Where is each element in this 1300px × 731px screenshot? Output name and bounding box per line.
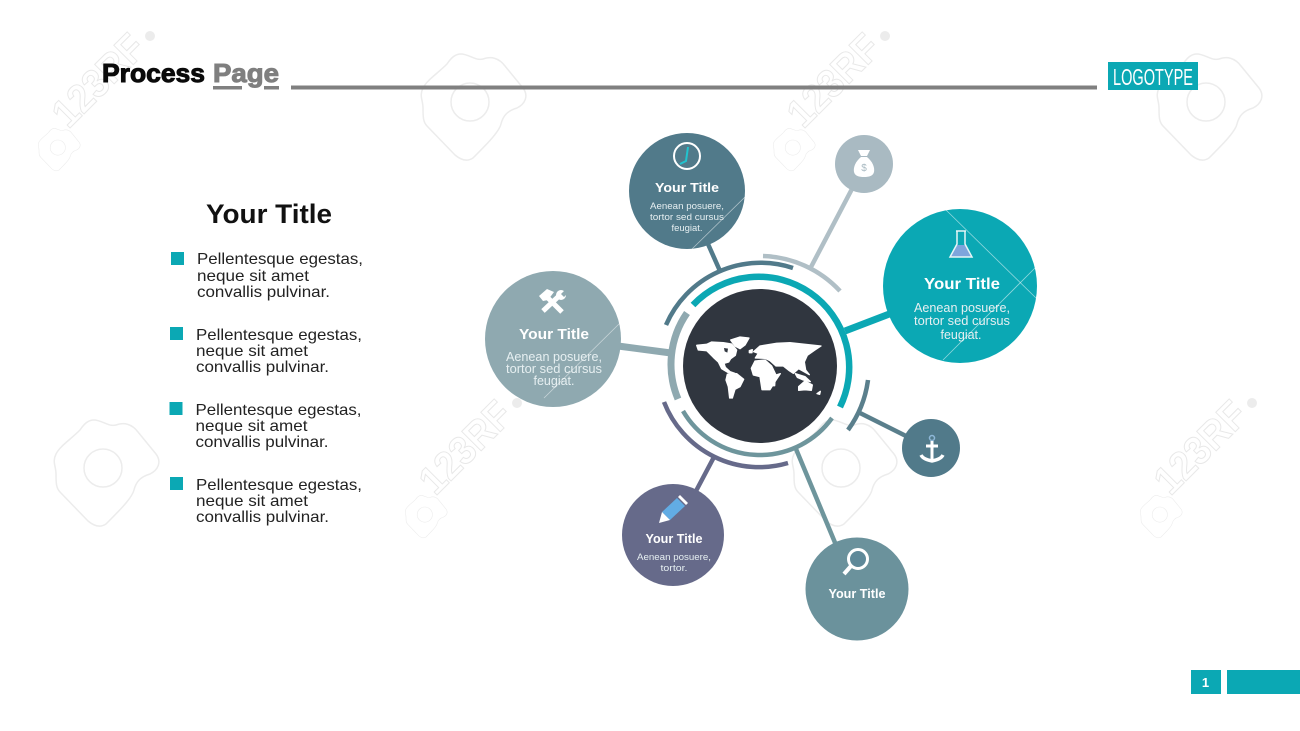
bullet 2: Pellentesque egestas, [196,327,362,344]
node: magnifier: Your Title [828,587,886,601]
logotype: LOGOTYPE [1113,64,1193,90]
central globe [683,289,837,443]
bullet 2: neque sit amet [196,343,309,360]
node: tools: feugiat. [534,374,574,388]
icon: money bag: $ [861,163,867,174]
left panel title: Your Title [206,199,332,229]
page heading [102,58,279,90]
node: flask: Aenean posuere, [914,301,1010,315]
node: tools: Aenean posuere, [506,350,602,364]
node: flask [883,209,1037,363]
node: money bag [835,135,893,193]
node: anchor [902,419,960,477]
bullet 3: convallis pulvinar. [196,434,328,451]
bullet 3 [170,402,362,451]
node: clock [629,133,745,249]
watermark stamps [38,26,1262,538]
bullet 4 [170,477,362,526]
node: flask: feugiat. [940,328,982,342]
node: pencil: tortor. [660,563,688,574]
bullet 1 [171,251,363,301]
page number [1191,670,1221,694]
bullet 1: neque sit amet [197,268,310,285]
node: clock: tortor sed cursus [650,212,724,223]
icon: crossed tools [539,289,569,312]
icon: flask [950,231,972,257]
page heading: Process [102,58,205,88]
page number: 1 [1202,675,1209,690]
bullet 2 [170,327,362,376]
node: tools [485,271,621,407]
node: tools: tortor sed cursus [506,362,602,376]
bullet 4: Pellentesque egestas, [196,477,362,494]
bullet 4: neque sit amet [196,493,309,510]
icon: pencil [659,495,688,523]
bullet 4: convallis pulvinar. [196,509,329,526]
node: tools: Your Title [519,326,589,343]
node: clock: Your Title [655,180,719,195]
node: pencil: Aenean posuere, [637,552,711,563]
icon: anchor [921,436,943,461]
node: pencil: Your Title [646,532,703,546]
header rule [291,86,1097,90]
bullet 3: Pellentesque egestas, [196,402,362,419]
bullet 3: neque sit amet [196,418,308,435]
bullet 2: convallis pulvinar. [196,359,329,376]
page heading: Page [213,58,279,88]
node: magnifier [806,538,908,640]
connector lines [618,187,908,545]
central ring arcs [664,256,868,467]
world map [697,337,821,398]
node: flask: tortor sed cursus [914,314,1010,328]
node: pencil [622,484,724,586]
bullet 1: Pellentesque egestas, [197,251,363,268]
bullet 1: convallis pulvinar. [197,284,330,301]
icon: clock [674,143,700,169]
logotype [1108,62,1198,90]
footer bar [1227,670,1300,694]
node: flask: Your Title [924,276,1000,293]
node: clock: Aenean posuere, [650,201,724,212]
icon: magnifier [844,550,868,574]
node: clock: feugiat. [672,223,702,234]
bullet list [170,251,363,526]
